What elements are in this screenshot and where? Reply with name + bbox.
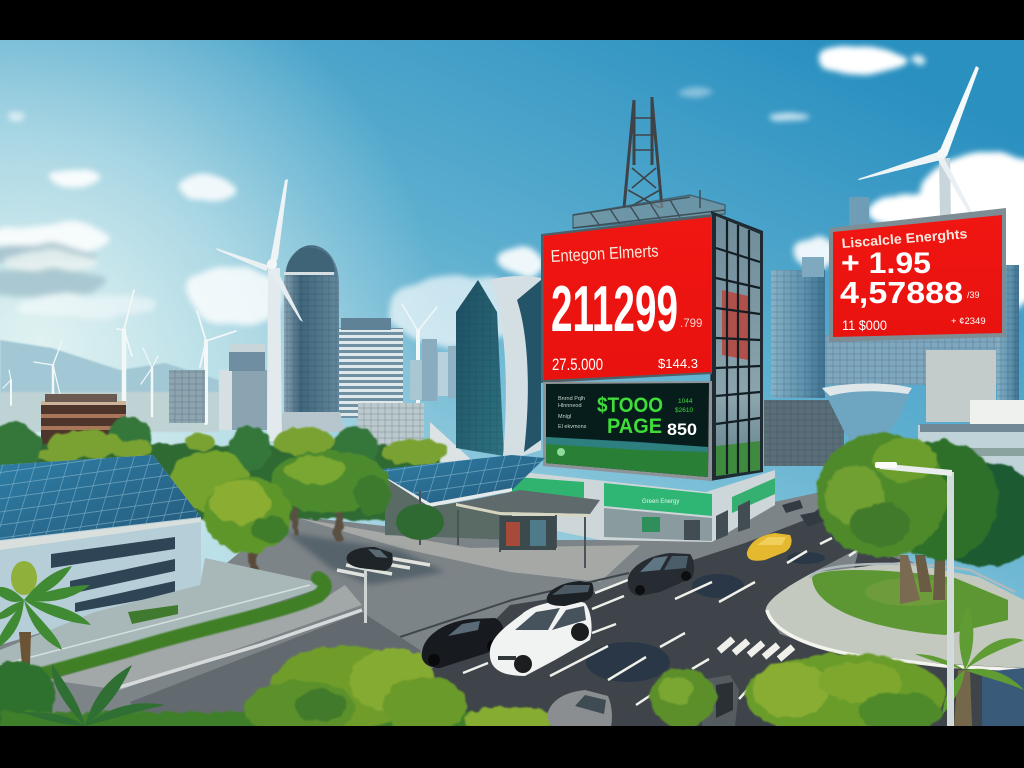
main billboard big number: 211299 [551, 272, 678, 345]
lower screen green headline: PAGE [607, 415, 662, 438]
street lamp, left [364, 548, 367, 623]
right billboard figures: 11 $000 [842, 317, 887, 333]
right billboard red panel [833, 215, 1002, 337]
bottom letterbox [0, 726, 1024, 768]
car: black sedan [422, 618, 504, 668]
car: dark sedan, centre [628, 553, 694, 596]
shaded road under trees [285, 532, 445, 585]
wind turbine: large right [858, 66, 979, 220]
station forecourt pavement [298, 518, 640, 582]
distant mountains and hazy city [0, 340, 219, 432]
right billboard figures: + ¢2349 [951, 316, 986, 327]
main tower: mast [624, 97, 662, 208]
car: yellow taxi [747, 533, 792, 561]
palm tree, bottom right [915, 605, 1024, 726]
curved glass tower [430, 276, 541, 465]
trees: bottom centre [650, 668, 716, 728]
ground and pavement base [0, 490, 1024, 726]
main billboard minor figures: $144.3 [658, 357, 698, 371]
car: dark, small centre [547, 581, 594, 606]
lower screen small text: Mnlgl [558, 414, 571, 420]
lane markings [337, 538, 862, 705]
wind turbine: large left [216, 179, 303, 441]
tree: centre left [204, 477, 292, 588]
right billboard figures: + 1.95 [841, 247, 931, 280]
car: dark, by the station [347, 547, 393, 571]
car: white hatchback [490, 601, 592, 676]
low green-banded building [503, 470, 775, 542]
lower screen small text: El ekvmons [558, 424, 587, 430]
solar-roofed building [0, 455, 201, 645]
top letterbox [0, 0, 1024, 40]
woods band, mid left [0, 416, 448, 520]
trees: bottom right [745, 653, 945, 737]
domed glass tower [270, 245, 345, 432]
palm tree, bottom left [20, 664, 165, 726]
lower screen small text [558, 396, 587, 430]
trees: mid left foreground [169, 451, 390, 540]
large tree, right [816, 433, 1024, 604]
brick building [41, 394, 126, 448]
lower screen green headline: 1044 [678, 398, 693, 405]
car: dark, bottom right [700, 675, 739, 726]
lower screen green headline: $2610 [675, 407, 693, 414]
roundabout [766, 545, 1024, 726]
lower screen small text: Bnrnd Pqlh [558, 396, 585, 402]
right billboard heading: Liscalcle Energhts [841, 226, 968, 251]
cars: distant right [782, 500, 826, 527]
car: grey, bottom [548, 690, 612, 726]
distant buildings left [169, 318, 456, 453]
left yard with fence [0, 558, 330, 682]
main tower: glass side [710, 211, 763, 481]
right billboard figures: 4,57888 [840, 275, 963, 310]
clouds [0, 46, 1024, 345]
lower screen green headline: $TOOO [597, 394, 663, 417]
lower screen small text: Hlnnneod [558, 403, 582, 409]
billboard: lower dark screen [543, 381, 712, 481]
distant buildings right [764, 197, 1024, 495]
main billboard minor figures: 27.5.000 [552, 355, 603, 374]
billboard: right, with support frame [829, 208, 1006, 342]
solar canopy station [373, 455, 600, 568]
palm tree, left [0, 561, 91, 665]
lower screen logo [557, 448, 565, 456]
dark asphalt main road [420, 497, 870, 726]
main billboard heading: Entegon Elmerts [550, 241, 659, 266]
right billboard figures [840, 247, 986, 333]
street lamp, right [875, 462, 954, 726]
trees: bottom left foreground [0, 646, 560, 736]
lower screen green headline [597, 394, 693, 438]
lower screen price: 850 [667, 420, 697, 439]
small wind turbines [3, 290, 437, 423]
main billboard minor figures [552, 318, 702, 374]
billboard: main red panel [541, 214, 712, 383]
left sidewalk and kerb [50, 585, 425, 726]
main billboard minor figures: .799 [680, 318, 702, 330]
road shadows [586, 552, 825, 682]
hedge [35, 578, 325, 676]
low green-banded building: Green Energy [642, 499, 679, 505]
main tower: roof truss [573, 190, 725, 228]
right billboard figures: /39 [967, 290, 980, 300]
